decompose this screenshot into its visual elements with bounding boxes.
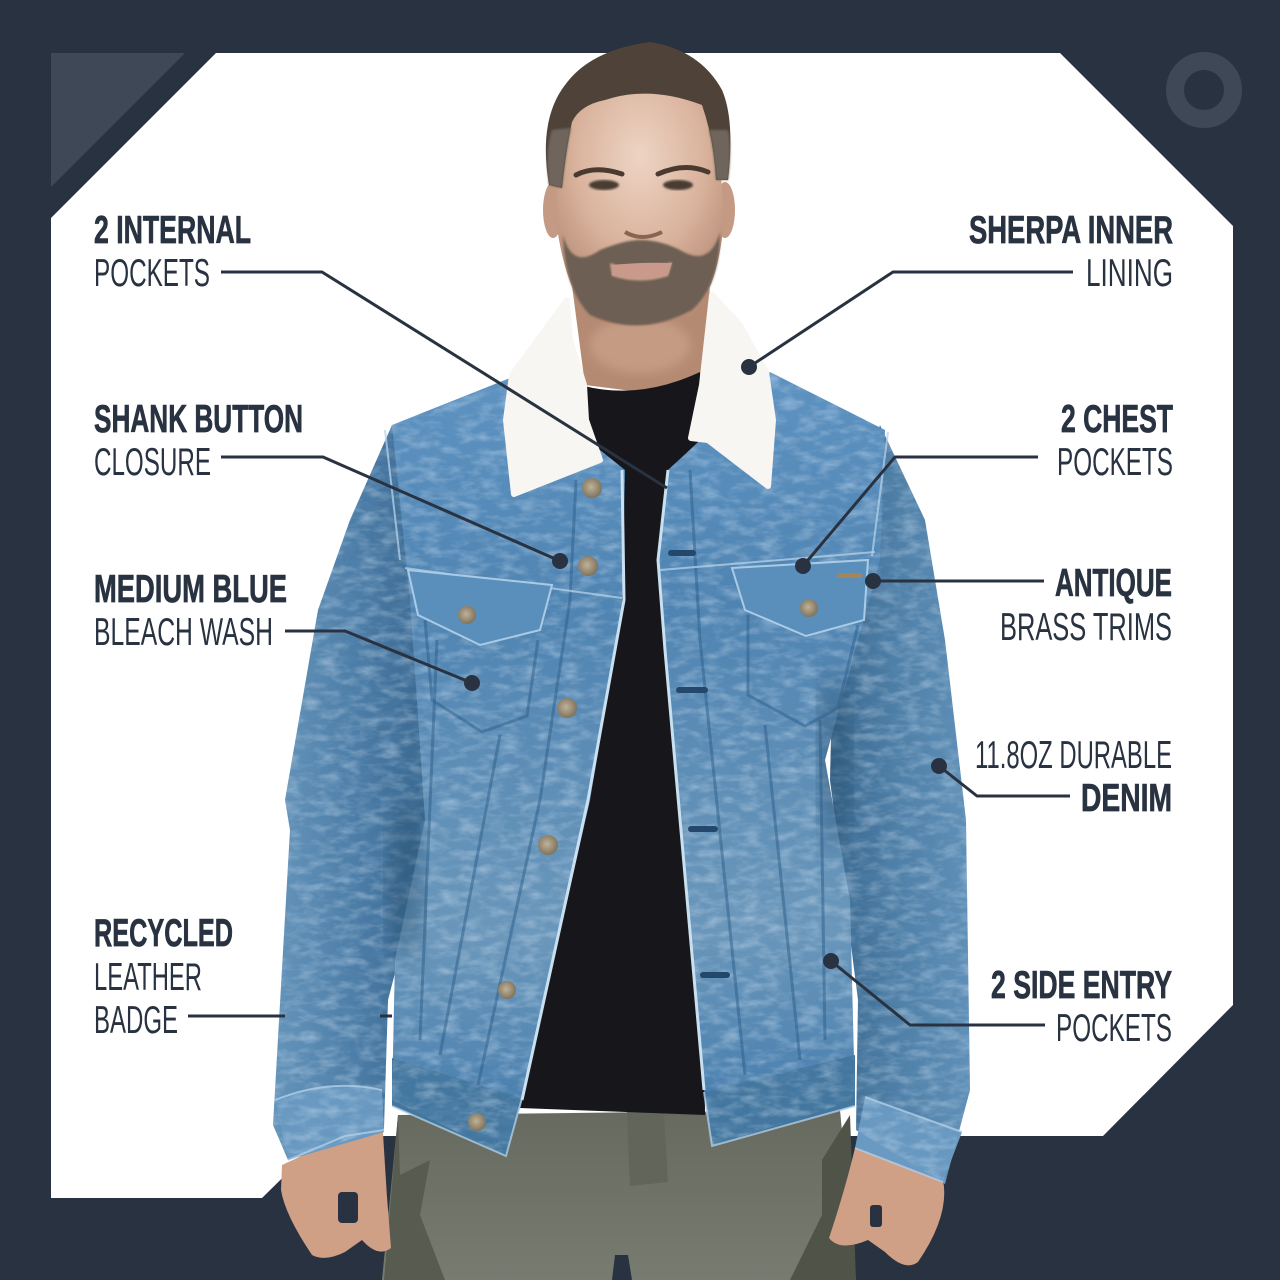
right hand	[281, 1132, 391, 1258]
callout: recycled leather badge	[94, 912, 392, 1042]
callout: sherpa inner lining	[741, 209, 1173, 375]
callout: 2 chest pockets: POCKETS	[1057, 441, 1173, 484]
chest badge	[837, 573, 862, 578]
head	[543, 42, 735, 325]
callout: medium blue bleach wash: BLEACH WASH	[94, 611, 273, 654]
callout: 2 internal pockets: POCKETS	[94, 252, 210, 295]
left hand	[829, 1148, 944, 1265]
nose	[625, 232, 662, 237]
model wearing denim jacket	[260, 42, 980, 1280]
callout: 2 side entry pockets	[823, 953, 1172, 1050]
neck	[570, 270, 710, 392]
callout: 2 internal pockets: 2 INTERNAL	[94, 209, 251, 252]
callout: shank button closure: SHANK BUTTON	[94, 398, 303, 441]
sleeve cuffs	[275, 1086, 384, 1160]
callout: 2 side entry pockets: POCKETS	[1056, 1007, 1172, 1050]
callout: 2 chest pockets: 2 CHEST	[1061, 398, 1173, 441]
decorative ring	[1175, 61, 1233, 119]
stitching highlights	[275, 1086, 382, 1100]
trousers	[382, 1110, 856, 1280]
pocket flaps	[408, 570, 552, 645]
callout: 2 chest pockets	[795, 398, 1173, 574]
lips	[612, 263, 672, 278]
callout: sherpa inner lining: SHERPA INNER	[969, 209, 1173, 252]
hair	[546, 42, 730, 188]
callout: antique brass trims	[865, 562, 1172, 649]
jacket sleeve wearer right	[273, 425, 440, 1160]
jacket sleeve wearer left	[830, 425, 970, 1184]
sherpa collar	[506, 295, 773, 494]
face	[556, 85, 724, 325]
callout: antique brass trims: ANTIQUE	[1055, 562, 1172, 605]
yokes and seams	[405, 568, 622, 598]
callout: 11.8oz durable denim: DENIM	[1081, 777, 1172, 820]
eyebrows	[576, 167, 708, 175]
callout: recycled leather badge: LEATHER	[94, 956, 202, 999]
callout: shank button closure: CLOSURE	[94, 441, 211, 484]
denim wash texture	[260, 370, 980, 1190]
brass buttons	[458, 478, 818, 1131]
waistbands	[392, 1058, 522, 1156]
beard	[563, 232, 720, 325]
callout: recycled leather badge: RECYCLED	[94, 912, 233, 955]
ears	[543, 182, 563, 238]
buttonholes	[668, 550, 730, 978]
callout: antique brass trims: BRASS TRIMS	[1000, 606, 1172, 649]
callout: shank button closure	[94, 398, 568, 569]
jacket body wearer right	[392, 378, 625, 1156]
decorative corner triangle	[51, 53, 185, 187]
callout: 2 internal pockets	[94, 209, 667, 488]
jacket body wearer left	[658, 372, 885, 1146]
callout: 2 side entry pockets: 2 SIDE ENTRY	[991, 964, 1172, 1007]
callout: medium blue bleach wash: MEDIUM BLUE	[94, 568, 287, 611]
greying temples	[548, 128, 730, 188]
eyes	[589, 180, 693, 190]
callout: medium blue bleach wash	[94, 568, 480, 691]
callout: sherpa inner lining: LINING	[1086, 252, 1173, 295]
callout: 11.8oz durable denim	[931, 734, 1172, 820]
callout: recycled leather badge: BADGE	[94, 999, 178, 1042]
t-shirt	[520, 372, 705, 1115]
placket edges	[522, 470, 624, 1100]
